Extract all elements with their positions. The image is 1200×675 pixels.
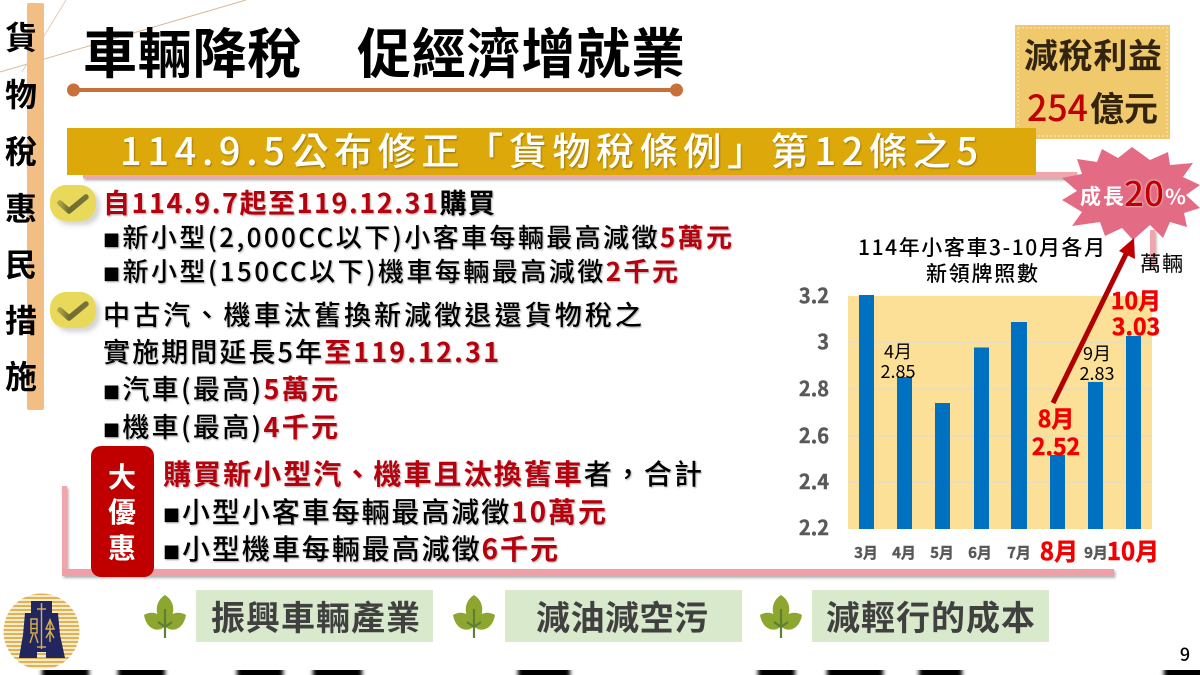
x axis labels: 6月: [968, 542, 992, 563]
y axis labels: 3.2: [799, 280, 829, 309]
x axis labels: [854, 542, 1108, 563]
x axis labels: 3月: [854, 542, 878, 563]
starburst: growth 20%: 20: [1124, 167, 1164, 216]
x axis labels: 7月: [1007, 542, 1031, 563]
data label: April: 4月: [884, 338, 912, 364]
tag: 減油減空污: 減油減空污: [536, 591, 708, 640]
data label: October: 10月: [1111, 282, 1161, 316]
text: new purchase period: 自114.9.7起至119.12.31購買: [103, 182, 495, 221]
pink connector lines: [62, 172, 1155, 576]
text: new small motorcycle: ■新小型(150CC以下)機車每輛最高減徵2千元: [103, 252, 678, 289]
text: small car total: ■小型小客車每輛最高減徵10萬元: [163, 491, 606, 531]
chart title: 114年小客車3-10月各月: [858, 232, 1105, 262]
data label: September: 2.83: [1080, 360, 1114, 386]
banner: 114.9.5 announcement: 114.9.5公布修正「貨物稅條例」第12條之5: [120, 121, 978, 176]
data label: August: 2.52: [1032, 428, 1080, 462]
x axis labels: 5月: [930, 542, 954, 563]
tag: 減輕行的成本: 減輕行的成本: [826, 591, 1035, 640]
y axis labels: 2.6: [799, 420, 829, 449]
y axis labels: [799, 280, 829, 541]
badge: 大優惠: 優: [108, 491, 136, 531]
tag: 減油減空污: [505, 590, 742, 642]
side bar: 貨物稅惠民措施: 物: [5, 70, 37, 116]
bar chart: 10月: [1107, 532, 1159, 567]
y axis labels: 2.8: [799, 373, 829, 402]
chart unit: 萬輛: [1140, 248, 1183, 278]
data label: August: [1032, 400, 1080, 462]
bar chart: 8月: [1040, 532, 1078, 567]
callout: tax benefit: 億元: [1090, 82, 1158, 131]
data label: October: [1111, 282, 1161, 342]
icon: leaf 3: [760, 595, 802, 638]
data label: April: [881, 338, 915, 384]
text: new small car: ■新小型(2,000CC以下)小客車每輛最高減徵5萬元: [103, 218, 732, 255]
bar chart: [799, 280, 1159, 567]
x axis labels: 4月: [892, 542, 916, 563]
icon: check 1: [50, 185, 96, 221]
starburst: growth 20%: 成長: [1080, 181, 1124, 211]
x axis labels: 9月: [1084, 542, 1108, 563]
data label: September: 9月: [1083, 340, 1111, 366]
text: used vehicle replacement: 中古汽、機車汰舊換新減徵退還貨物稅之: [103, 294, 642, 333]
starburst: growth 20%: [1062, 147, 1200, 240]
side bar: 貨物稅惠民措施: 施: [5, 352, 37, 398]
side bar: 貨物稅惠民措施: 貨: [5, 13, 37, 59]
page number: 9: [1180, 641, 1190, 667]
side bar: 貨物稅惠民措施: 惠: [5, 184, 37, 230]
data label: August: 8月: [1038, 400, 1074, 434]
badge: 大優惠: [91, 446, 154, 577]
starburst: growth 20%: %: [1165, 181, 1186, 210]
callout: tax benefit: 減稅利益: [1024, 29, 1162, 78]
title underline: [67, 84, 683, 96]
side bar: 貨物稅惠民措施: 措: [5, 296, 37, 342]
y axis labels: 3: [817, 326, 829, 355]
callout: tax benefit: 254: [1027, 80, 1088, 132]
tag: 振興車輛產業: 振興車輛產業: [211, 591, 420, 640]
icon: check 2: [50, 292, 96, 328]
text: period extended: 實施期間延長5年至119.12.31: [103, 331, 499, 370]
side bar: 貨物稅惠民措施: 稅: [5, 127, 37, 173]
y axis labels: 2.4: [799, 466, 829, 495]
icon: leaf 1: [144, 595, 186, 638]
data label: October: 3.03: [1112, 308, 1160, 342]
text: small motorcycle total: ■小型機車每輛最高減徵6千元: [163, 528, 558, 568]
text: car max: ■汽車(最高)5萬元: [103, 368, 338, 407]
y axis labels: 2.2: [799, 512, 829, 541]
data label: September: [1080, 340, 1114, 386]
chart title: 新領牌照數: [926, 258, 1038, 288]
text: motorcycle max: ■機車(最高)4千元: [103, 406, 338, 445]
badge: 大優惠: 惠: [108, 527, 136, 567]
data label: April: 2.85: [881, 358, 915, 384]
bars: [859, 295, 1141, 529]
title: 車輛降稅 促經濟增就業: [83, 10, 685, 89]
arrow: growth: [1053, 238, 1135, 403]
logo: [0, 594, 84, 670]
icon: leaf 2: [453, 595, 495, 638]
text: combined offer: 購買新小型汽、機車且汰換舊車者，合計: [163, 453, 702, 493]
callout: tax benefit: [1015, 25, 1170, 139]
chart title: [858, 232, 1105, 288]
side bar: 貨物稅惠民措施: 民: [5, 240, 37, 286]
side bar: 貨物稅惠民措施: [5, 3, 44, 410]
badge: 大優惠: 大: [108, 456, 136, 496]
